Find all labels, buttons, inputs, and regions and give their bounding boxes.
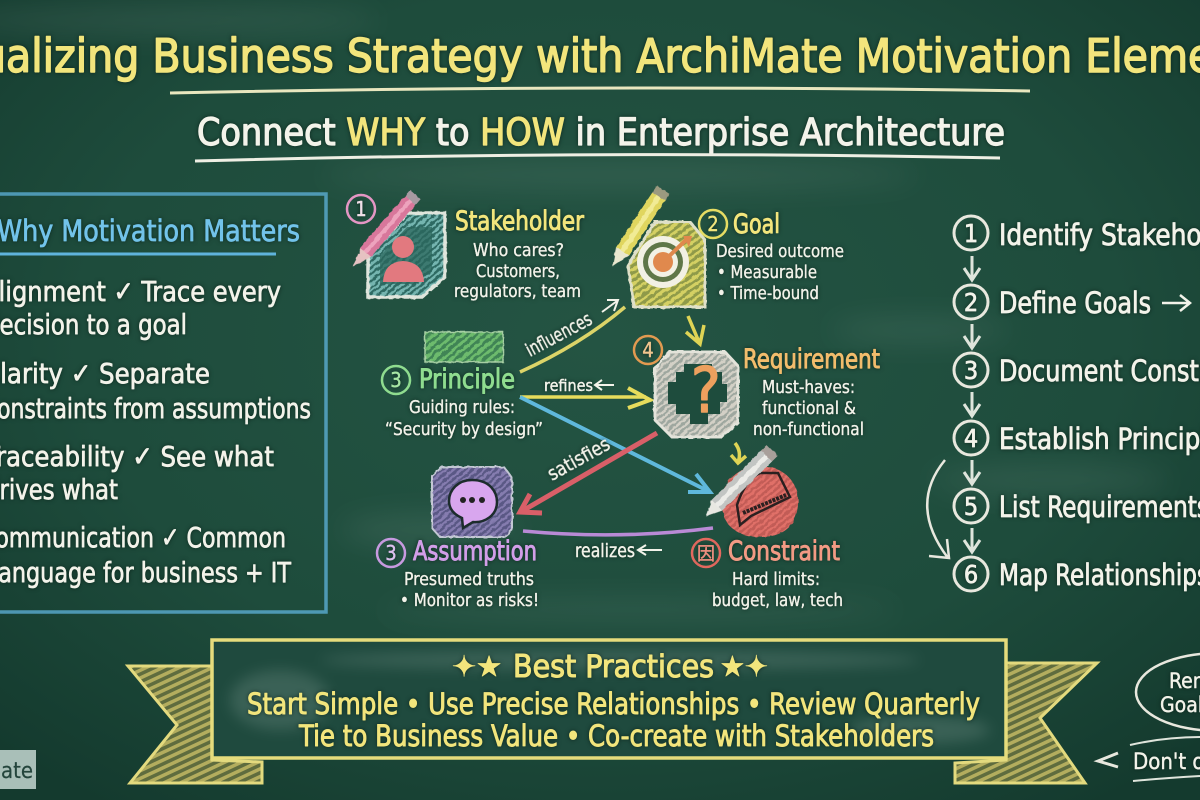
arrow: realizes: [523, 528, 713, 562]
description: • Monitor as risks!: [400, 590, 539, 611]
description: Who cares?: [473, 240, 564, 261]
arrow: requirement to constraint: [731, 443, 746, 463]
step 2: 2: [964, 288, 978, 317]
description: [712, 569, 843, 611]
item: clarity: [0, 357, 311, 425]
description: [400, 569, 539, 611]
panel heading: Why Motivation Matters: [0, 214, 300, 248]
banner line 1: Start Simple • Use Precise Relationships • Review Quarterly: [247, 687, 980, 721]
step 1: 1: [964, 219, 978, 248]
arrow down: [964, 256, 980, 280]
arrow: influences: [520, 300, 625, 372]
heading: Stakeholder: [455, 206, 584, 237]
icon: stakeholder box with pencil: [348, 190, 445, 297]
arrow down: [964, 392, 980, 416]
description: “Security by design”: [385, 419, 543, 440]
heading: Goal: [733, 209, 780, 240]
step 6: 6: [964, 560, 978, 589]
description: budget, law, tech: [712, 590, 843, 611]
number badge 1: [347, 195, 375, 223]
description: Customers,: [476, 261, 560, 282]
banner line 2: Tie to Business Value • Co-create with Stakeholders: [298, 719, 934, 753]
number badge 5: [692, 539, 720, 567]
number badge 3: 3: [390, 368, 402, 392]
step 4: 4: [964, 424, 978, 453]
description: non-functional: [753, 419, 864, 440]
arrow down: [964, 528, 980, 552]
callout: don't overcomplicate: [1098, 737, 1200, 781]
icon: assumption speech bubble: [432, 467, 512, 537]
tag: generate button: ate: [1, 759, 33, 784]
panel: why motivation matters: [0, 194, 326, 612]
description: [454, 240, 581, 302]
description: [385, 397, 543, 440]
number badge 1: 1: [355, 197, 367, 221]
element: stakeholder: [347, 190, 584, 302]
stars left: ✦★: [452, 650, 502, 683]
description: Guiding rules:: [409, 397, 515, 418]
icon: goal target with pencil: [606, 186, 705, 307]
banner: best practices: [128, 640, 1097, 783]
arrow down: [964, 460, 980, 484]
callout: remember goals: [1136, 653, 1200, 731]
banner panel: [212, 640, 1006, 758]
arrow: blue principle to constraint: [520, 397, 710, 492]
element: principle: [382, 332, 543, 440]
tag: generate button: [0, 750, 36, 789]
stars right: ★✦: [720, 650, 768, 683]
description: [753, 377, 864, 440]
step 2: [954, 285, 1190, 320]
number badge 4: 4: [642, 338, 654, 362]
steps list: [927, 216, 1200, 592]
number badge 5: 因: [697, 544, 715, 564]
element: assumption: [377, 467, 539, 611]
description: Hard limits:: [732, 569, 820, 590]
icon: requirement puzzle octagon: [655, 352, 738, 437]
heading: Requirement: [743, 344, 880, 375]
arrow: goal to requirement: [686, 316, 704, 344]
arrow: influences: influences: [522, 308, 596, 361]
step 3: 3: [964, 356, 978, 385]
number badge 2: 2: [707, 212, 719, 236]
description: • Measurable: [717, 262, 817, 283]
number badge 4: [634, 336, 662, 364]
arrow: curved skip from step 4 to step 6: [927, 460, 949, 558]
heading: Constraint: [728, 536, 840, 567]
heading: Assumption: [413, 536, 537, 567]
arrow: refines: refines: [544, 376, 593, 395]
icon: constraint circle with pencil: [700, 445, 798, 537]
element: constraint: [692, 445, 843, 611]
item: communication: [0, 521, 292, 589]
description: [716, 241, 844, 304]
icon: principle rectangle: [425, 332, 503, 362]
description: regulators, team: [454, 281, 581, 302]
subtitle: Connect WHY to HOW in Enterprise Architecture: [197, 111, 1005, 154]
arrow: satisfies: [520, 433, 657, 513]
description: functional &: [762, 398, 856, 419]
number badge 3: [377, 539, 405, 567]
arrow: satisfies: satisfies: [544, 433, 614, 485]
step 5: 5: [964, 492, 978, 521]
item: traceability: [0, 440, 274, 506]
description: • Time-bound: [717, 283, 819, 304]
arrow: realizes: realizes: [575, 540, 635, 562]
heading: Principle: [419, 364, 515, 395]
number badge 3: [382, 366, 410, 394]
arrow down: [964, 324, 980, 348]
item: communication: language for business + IT: [0, 556, 292, 589]
item: alignment: [0, 275, 281, 341]
element: goal: [606, 186, 844, 307]
icon: requirement puzzle octagon: ?: [691, 354, 721, 427]
right ribbon: [955, 663, 1097, 783]
description: Desired outcome: [716, 241, 844, 262]
description: Presumed truths: [404, 569, 534, 590]
description: Must-haves:: [762, 377, 855, 398]
banner heading: Best Practices: [513, 649, 714, 685]
number badge 3: 3: [385, 541, 397, 565]
number badge 2: [699, 210, 727, 238]
step 2: Define Goals: [999, 286, 1151, 320]
element: requirement: [634, 336, 880, 440]
left ribbon: [128, 666, 262, 783]
arrow: refines: [520, 376, 650, 408]
